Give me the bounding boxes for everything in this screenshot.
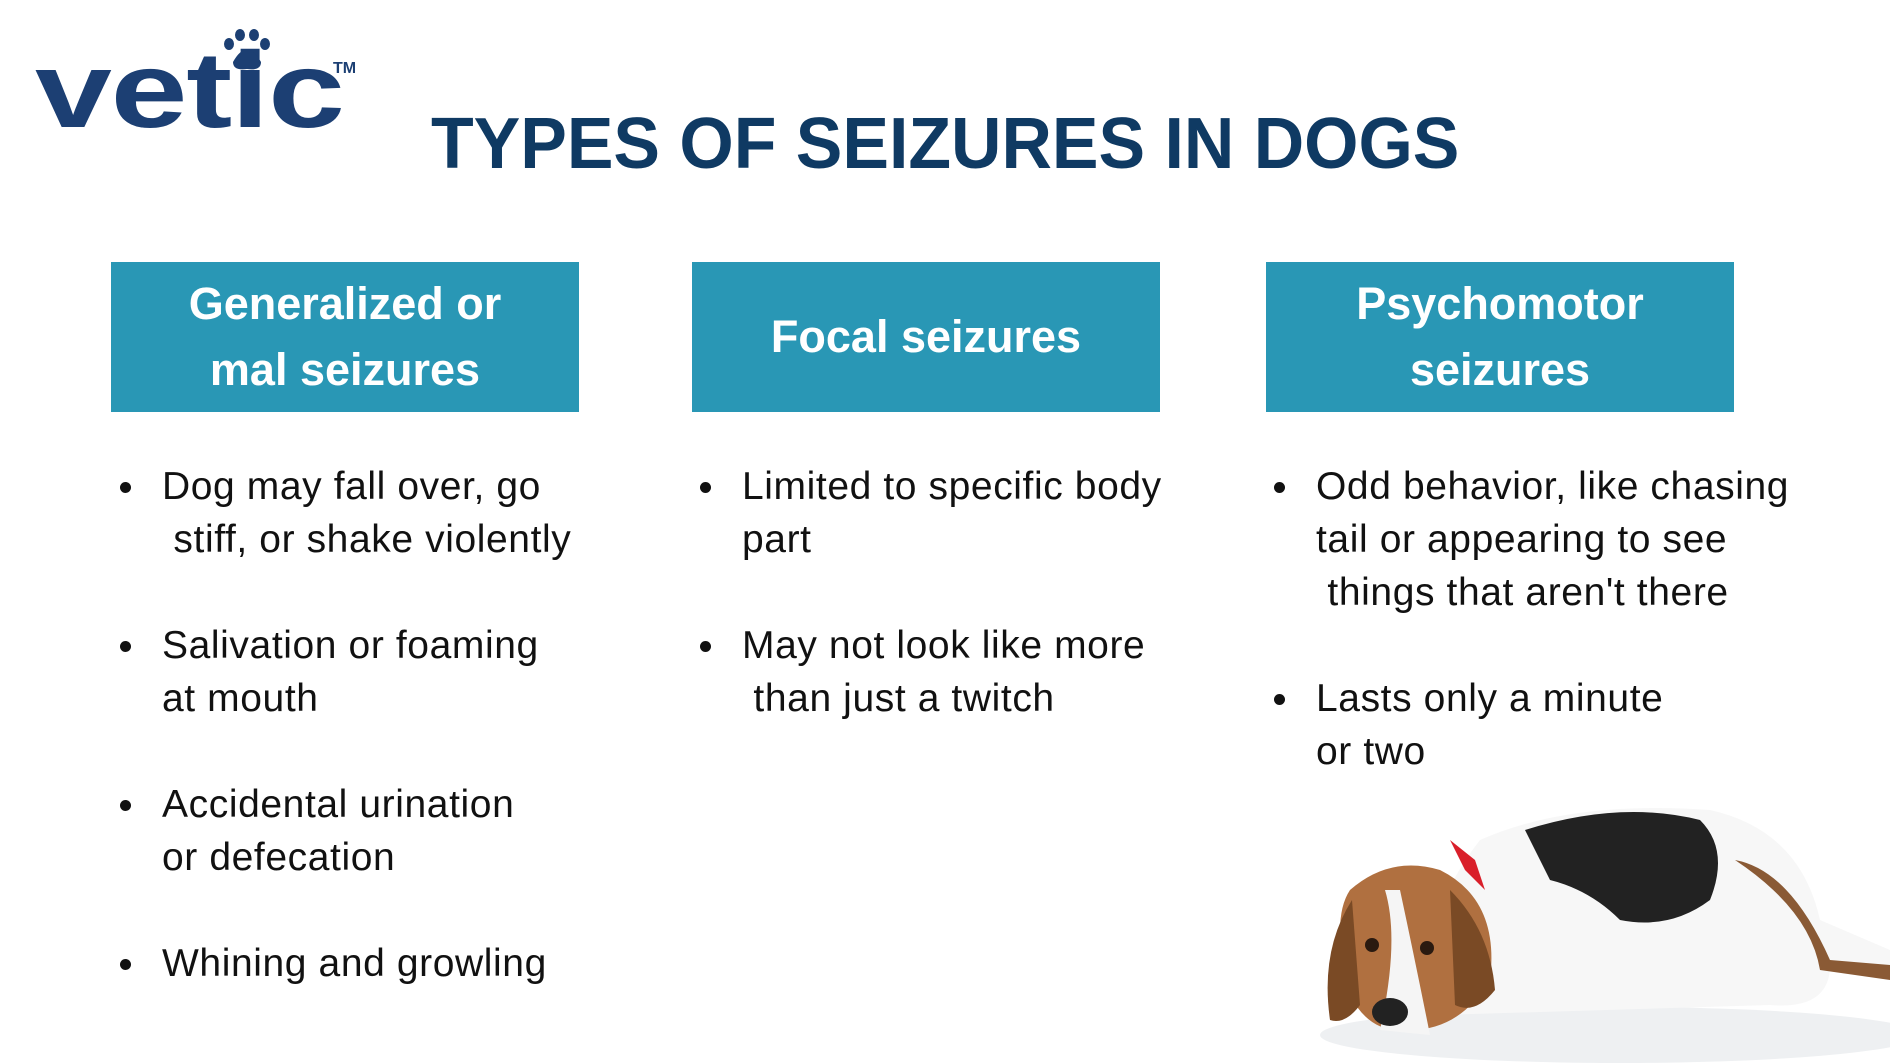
header: focal: [692, 262, 1160, 412]
list: focal: Limited to specific body part: [742, 465, 1162, 561]
list: generalized: Dog may fall over, go stiff, or shake violently: [162, 465, 571, 561]
list: psychomotor: Lasts only a minute or two: [1316, 677, 1663, 773]
title: TYPES OF SEIZURES IN DOGS: [431, 104, 1459, 184]
list: generalized: Accidental urination or defecation: [162, 783, 514, 879]
list: generalized: [120, 465, 571, 985]
header: psychomotor: Psychomotor: [1356, 278, 1644, 329]
header: generalized: mal seizures: [210, 344, 480, 395]
header: generalized: [111, 262, 579, 412]
trademark: TM: [333, 60, 356, 77]
list: generalized: Salivation or foaming at mouth: [162, 624, 539, 720]
list: psychomotor: Odd behavior, like chasing tail or appearing to see things that aren't there: [1316, 465, 1789, 614]
icon: paw: [224, 29, 270, 70]
image: beagle: [1320, 812, 1890, 1063]
list: generalized: Whining and growling: [162, 942, 547, 985]
header: generalized: Generalized or: [189, 278, 501, 329]
logo text: vetic: [35, 29, 344, 150]
header: psychomotor: seizures: [1410, 344, 1590, 395]
header: focal: Focal seizures: [771, 311, 1081, 362]
list: focal: [700, 465, 1162, 720]
logo: [35, 29, 356, 150]
header: psychomotor: [1266, 262, 1734, 412]
list: focal: May not look like more than just a twitch: [742, 624, 1145, 720]
list: psychomotor: [1274, 465, 1789, 773]
